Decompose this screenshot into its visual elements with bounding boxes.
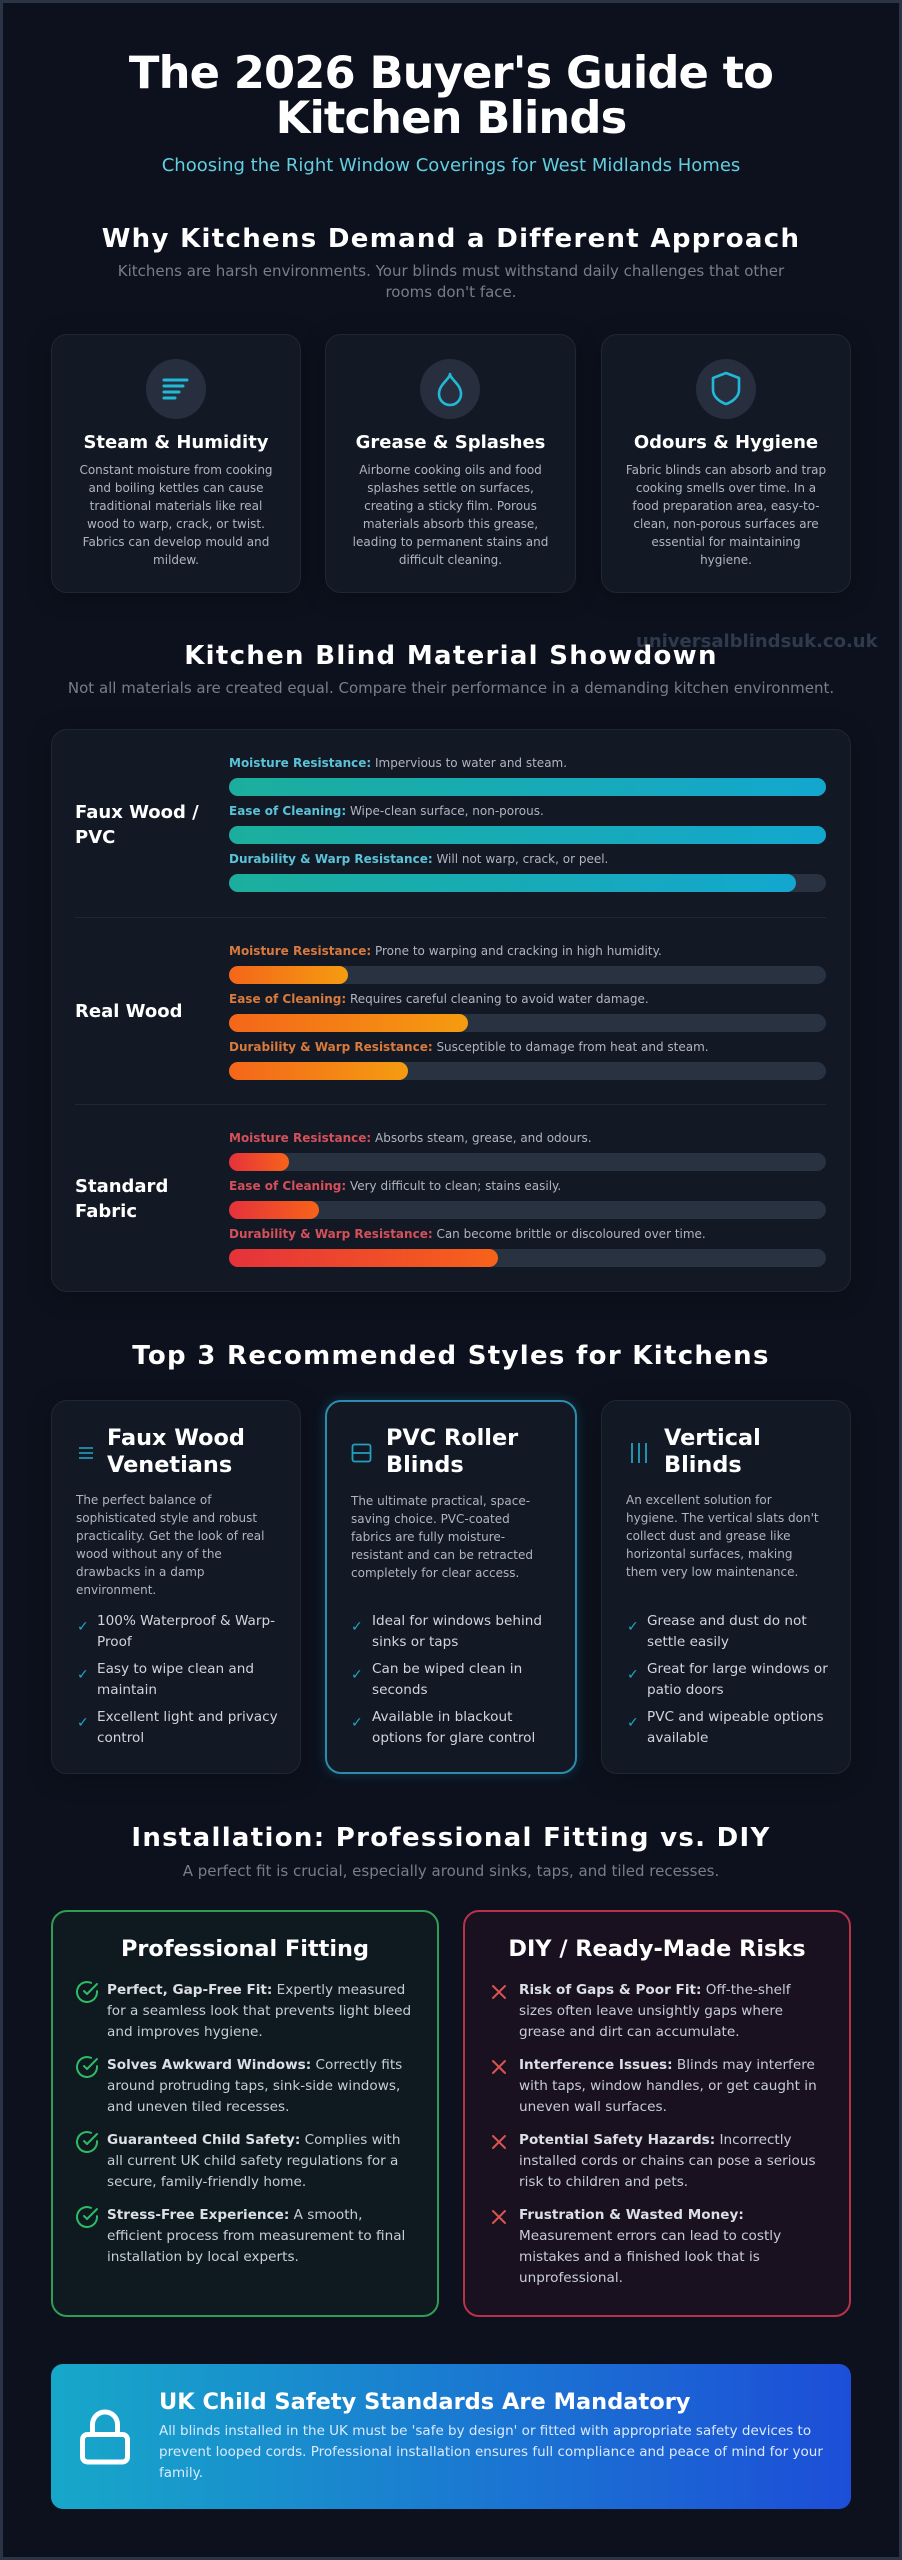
- heading: diy risks: DIY / Ready-Made Risks: [508, 1936, 806, 1962]
- callout text: prevent looped cords. Professional installation ensures full compliance and peace of mind for your: [159, 2444, 823, 2460]
- text: steam: wood to warp, crack, or twist.: [87, 517, 265, 531]
- risk: with taps, window handles, or get caught in: [519, 2078, 817, 2094]
- name: standard fabric: Fabric: [75, 1201, 137, 1222]
- bar: moisture 10%: [229, 1153, 826, 1171]
- list item: available: [647, 1730, 708, 1746]
- watermark: universalblindsuk.co.uk: [636, 631, 878, 652]
- bar: durability 95%: [229, 874, 826, 892]
- intro text: why kitchens: Kitchens are harsh environments. Your blinds must withstand daily challenges that other: [118, 262, 784, 280]
- icon: check: [76, 1981, 98, 2003]
- heading: why kitchens: Why Kitchens Demand a Different Approach: [102, 224, 800, 254]
- bar: cleaning 100%: [229, 826, 826, 844]
- text: odours: clean, non-porous surfaces are: [633, 517, 819, 531]
- text: vertical: collect dust and grease like: [626, 1529, 791, 1543]
- icon: steam: [146, 359, 206, 419]
- bar: cleaning 15%: [229, 1201, 826, 1219]
- intro text: why kitchens: rooms don't face.: [385, 283, 517, 301]
- title: [129, 46, 773, 144]
- list item: Can be wiped clean in: [372, 1661, 522, 1677]
- callout text: [159, 2421, 823, 2484]
- heading: vertical blinds: Blinds: [664, 1452, 742, 1478]
- panel: grease and splashes: [325, 334, 576, 593]
- risk: risk to children and pets.: [519, 2174, 688, 2190]
- benefit: [107, 2055, 402, 2118]
- benefit: and uneven tiled recesses.: [107, 2099, 289, 2115]
- heading: steam: Steam & Humidity: [83, 432, 269, 453]
- callout text: family.: [159, 2465, 203, 2481]
- intro text: material showdown: Not all materials are created equal. Compare their performance in a demanding kitchen environment.: [68, 679, 834, 697]
- text: vertical: [626, 1493, 819, 1579]
- text: odours: essential for maintaining: [651, 535, 801, 549]
- list item: control: [97, 1730, 144, 1746]
- benefit: installation by local experts.: [107, 2249, 299, 2265]
- heading: material showdown: Kitchen Blind Material Showdown: [184, 641, 718, 671]
- benefit: Solves Awkward Windows: Correctly fits: [107, 2057, 402, 2073]
- callout heading: UK Child Safety Standards Are Mandatory: [159, 2389, 690, 2415]
- benefit: efficient process from measurement to final: [107, 2228, 405, 2244]
- check: ✓: [627, 1619, 639, 1635]
- bar: durability 30%: [229, 1062, 826, 1080]
- bar: moisture 100%: [229, 778, 826, 796]
- list item: seconds: [372, 1682, 428, 1698]
- text: vertical: horizontal surfaces, making: [626, 1547, 792, 1561]
- risk: mistakes and a finished look that is: [519, 2249, 760, 2265]
- heading: installation: Installation: Professional Fitting vs. DIY: [131, 1823, 771, 1853]
- text: grease: materials absorb this grease,: [363, 517, 538, 531]
- check: ✓: [77, 1619, 89, 1635]
- text: steam: traditional materials like real: [90, 499, 262, 513]
- callout text: All blinds installed in the UK must be 'safe by design' or fitted with appropriate safety devices to: [159, 2423, 811, 2439]
- text: vertical: hygiene. The vertical slats don't: [626, 1511, 819, 1525]
- check: ✓: [351, 1667, 363, 1683]
- text: vertical: them very low maintenance.: [626, 1565, 798, 1579]
- text: grease: leading to permanent stains and: [353, 535, 548, 549]
- text: pvc roller: resistant and can be retracted: [351, 1548, 533, 1562]
- name: faux wood: Faux Wood /: [75, 802, 199, 823]
- list item: Available in blackout: [372, 1709, 512, 1725]
- text: faux wood: sophisticated style and robust: [76, 1511, 257, 1525]
- subtitle: Choosing the Right Window Coverings for West Midlands Homes: [162, 155, 740, 176]
- heading: vertical blinds: [664, 1424, 761, 1478]
- name: faux wood: [75, 802, 199, 848]
- panel: material comparison: [51, 729, 851, 1292]
- text: faux wood: environment.: [76, 1583, 156, 1597]
- risk: Frustration & Wasted Money:: [519, 2207, 744, 2223]
- risk: uneven wall surfaces.: [519, 2099, 667, 2115]
- label: moisture: Moisture Resistance: Absorbs steam, grease, and odours.: [229, 1131, 592, 1145]
- label: cleaning: Ease of Cleaning: Wipe-clean surface, non-porous.: [229, 804, 544, 818]
- icon: check: [75, 2205, 99, 2229]
- panel: professional fitting: [51, 1910, 439, 2317]
- title: The 2026 Buyer's Guide to: [129, 46, 773, 99]
- benefit: secure, family-friendly home.: [107, 2174, 306, 2190]
- check: ✓: [351, 1715, 363, 1731]
- risk: [519, 1980, 791, 2043]
- list item: Easy to wipe clean and: [97, 1661, 254, 1677]
- risk: [519, 2055, 817, 2118]
- check: ✓: [77, 1715, 89, 1731]
- icon: cross: [487, 2055, 511, 2079]
- text: odours: Fabric blinds can absorb and trap: [626, 463, 826, 477]
- list item: options for glare control: [372, 1730, 535, 1746]
- list item: [97, 1709, 278, 1746]
- text: grease: [353, 463, 548, 567]
- benefit: [107, 2130, 400, 2193]
- text: faux wood: [76, 1493, 264, 1597]
- benefit: Stress-Free Experience: A smooth,: [107, 2207, 362, 2223]
- benefit: Guaranteed Child Safety: Complies with: [107, 2132, 400, 2148]
- text: odours: [626, 463, 826, 567]
- bar: moisture 20%: [229, 966, 826, 984]
- text: grease: creating a sticky film. Porous: [364, 499, 537, 513]
- material: faux wood / pvc: [75, 756, 826, 892]
- text: faux wood: The perfect balance of: [76, 1493, 211, 1507]
- icon: cross: [487, 2130, 511, 2154]
- risk: unprofessional.: [519, 2270, 623, 2286]
- heading: pvc roller blinds: PVC Roller: [386, 1424, 518, 1450]
- callout: child safety: [51, 2364, 851, 2509]
- text: pvc roller: fabrics are fully moisture-: [351, 1530, 505, 1544]
- panel: steam and humidity: [51, 334, 301, 593]
- text: steam: Constant moisture from cooking: [79, 463, 273, 477]
- list item: [372, 1613, 542, 1650]
- benefit: [107, 1982, 411, 2040]
- text: faux wood: practicality. Get the look of real: [76, 1529, 264, 1543]
- panel: faux wood venetians: [51, 1400, 301, 1774]
- text: odours: cooking smells over time. In a: [636, 481, 816, 495]
- heading: pvc roller blinds: [386, 1424, 518, 1478]
- text: pvc roller: saving choice. PVC-coated: [351, 1512, 510, 1526]
- name: standard fabric: [75, 1176, 168, 1222]
- text: steam: mildew.: [153, 553, 199, 567]
- heading: faux wood venetians: [107, 1424, 245, 1478]
- check: ✓: [77, 1667, 89, 1683]
- icon: lock: [75, 2407, 135, 2467]
- text: steam: and boiling kettles can cause: [88, 481, 264, 495]
- intro text: installation: A perfect fit is crucial, especially around sinks, taps, and tiled recesses.: [183, 1862, 719, 1880]
- label: durability: Durability & Warp Resistance: Will not warp, crack, or peel.: [229, 852, 608, 866]
- icon: shield: [696, 359, 756, 419]
- label: durability: Durability & Warp Resistance: Can become brittle or discoloured over time.: [229, 1227, 706, 1241]
- bar: durability 45%: [229, 1249, 826, 1267]
- title: Kitchen Blinds: [276, 91, 626, 144]
- list item: 100% Waterproof & Warp-: [97, 1613, 275, 1629]
- text: pvc roller: The ultimate practical, space-: [351, 1494, 530, 1508]
- risk: grease and dirt can accumulate.: [519, 2024, 740, 2040]
- icon: check: [75, 2130, 99, 2154]
- label: cleaning: Ease of Cleaning: Very difficult to clean; stains easily.: [229, 1179, 561, 1193]
- material: real wood: [75, 944, 826, 1080]
- list item: [647, 1661, 828, 1698]
- panel: odours and hygiene: [601, 334, 851, 593]
- benefit: all current UK child safety regulations for a: [107, 2153, 398, 2169]
- heading: pvc roller blinds: Blinds: [386, 1452, 464, 1478]
- risk: sizes often leave unsightly gaps where: [519, 2003, 783, 2019]
- icon: check: [76, 2056, 98, 2078]
- icon: roller blind: [352, 1444, 372, 1462]
- list item: [372, 1661, 522, 1698]
- list item: [647, 1709, 824, 1746]
- icon: vertical slats: [631, 1443, 647, 1463]
- risk: Potential Safety Hazards: Incorrectly: [519, 2132, 792, 2148]
- text: grease: splashes settle on surfaces,: [367, 481, 534, 495]
- list item: Great for large windows or: [647, 1661, 828, 1677]
- icon: drop: [420, 359, 480, 419]
- name: faux wood: PVC: [75, 827, 115, 848]
- label: moisture: Moisture Resistance: Prone to warping and cracking in high humidity.: [229, 944, 662, 958]
- text: faux wood: wood without any of the: [76, 1547, 222, 1561]
- risk: Interference Issues: Blinds may interfere: [519, 2057, 815, 2073]
- risk: Measurement errors can lead to costly: [519, 2228, 781, 2244]
- panel: diy risks: [463, 1910, 851, 2317]
- list item: Excellent light and privacy: [97, 1709, 278, 1725]
- check: ✓: [627, 1715, 639, 1731]
- text: odours: hygiene.: [700, 553, 752, 567]
- text: odours: food preparation area, easy-to-: [632, 499, 820, 513]
- label: durability: Durability & Warp Resistance: Susceptible to damage from heat and steam.: [229, 1040, 709, 1054]
- text: grease: difficult cleaning.: [399, 553, 502, 567]
- heading: faux wood venetians: Venetians: [107, 1452, 232, 1478]
- list item: settle easily: [647, 1634, 729, 1650]
- benefit: for a seamless look that prevents light bleed: [107, 2003, 411, 2019]
- risk: installed cords or chains can pose a serious: [519, 2153, 816, 2169]
- panel: pvc roller blinds: [325, 1400, 577, 1774]
- list item: [97, 1613, 275, 1650]
- list item: maintain: [97, 1682, 157, 1698]
- risk: Risk of Gaps & Poor Fit: Off-the-shelf: [519, 1982, 791, 1998]
- text: pvc roller: [350, 1494, 533, 1580]
- list item: Proof: [97, 1634, 132, 1650]
- benefit: and improves hygiene.: [107, 2024, 263, 2040]
- list item: Ideal for windows behind: [372, 1613, 542, 1629]
- intro text: why kitchens: [118, 262, 784, 301]
- bar: cleaning 40%: [229, 1014, 826, 1032]
- risk: [519, 2130, 816, 2193]
- icon: venetian slats: [79, 1447, 93, 1459]
- panel: vertical blinds: [601, 1400, 851, 1774]
- icon: cross: [487, 2205, 511, 2229]
- list item: patio doors: [647, 1682, 724, 1698]
- text: vertical: An excellent solution for: [626, 1493, 772, 1507]
- heading: faux wood venetians: Faux Wood: [107, 1424, 245, 1450]
- benefit: Perfect, Gap-Free Fit: Expertly measured: [107, 1982, 405, 1998]
- icon: cross: [487, 1980, 511, 2004]
- material: standard fabric: [75, 1131, 826, 1267]
- list item: [97, 1661, 254, 1698]
- list item: [372, 1709, 535, 1746]
- text: steam: Fabrics can develop mould and: [83, 535, 269, 549]
- label: moisture: Moisture Resistance: Impervious to water and steam.: [229, 756, 567, 770]
- heading: recommended styles: Top 3 Recommended Styles for Kitchens: [132, 1341, 770, 1371]
- heading: professional fitting: Professional Fitting: [121, 1936, 369, 1962]
- benefit: [107, 2205, 405, 2268]
- risk: [519, 2205, 781, 2289]
- list item: PVC and wipeable options: [647, 1709, 824, 1725]
- text: faux wood: drawbacks in a damp: [76, 1565, 205, 1579]
- check: ✓: [627, 1667, 639, 1683]
- heading: vertical blinds: Vertical: [664, 1424, 761, 1450]
- benefit: around protruding taps, sink-side windows,: [107, 2078, 400, 2094]
- list item: [647, 1613, 807, 1650]
- heading: grease: Grease & Splashes: [356, 432, 545, 453]
- name: standard fabric: Standard: [75, 1176, 168, 1197]
- label: cleaning: Ease of Cleaning: Requires careful cleaning to avoid water damage.: [229, 992, 649, 1006]
- list item: Grease and dust do not: [647, 1613, 807, 1629]
- list item: sinks or taps: [372, 1634, 458, 1650]
- text: steam: [79, 463, 273, 567]
- text: grease: Airborne cooking oils and food: [359, 463, 542, 477]
- check: ✓: [351, 1619, 363, 1635]
- heading: odours: Odours & Hygiene: [634, 432, 818, 453]
- name: real wood: Real Wood: [75, 1001, 182, 1022]
- text: pvc roller: completely for clear access.: [351, 1566, 519, 1580]
